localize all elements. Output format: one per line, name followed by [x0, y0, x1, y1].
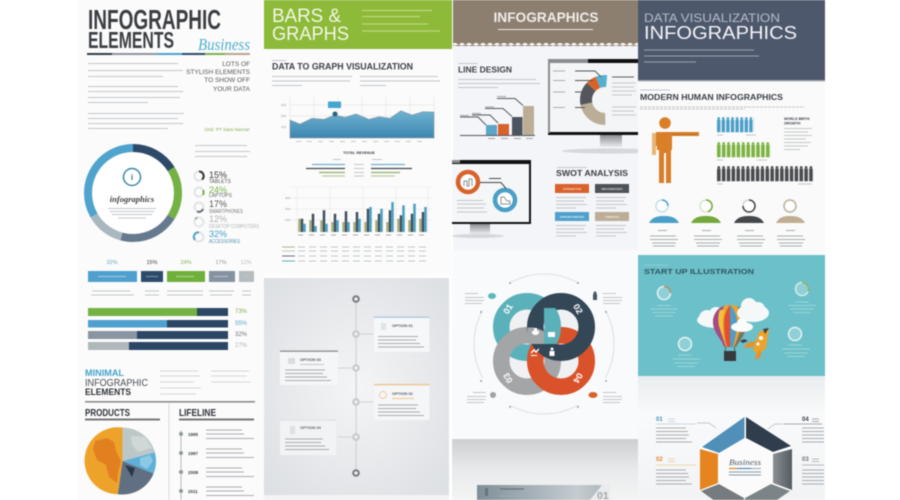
swot: threats: THREATS	[605, 215, 619, 219]
option: dark dome	[734, 200, 765, 246]
lifeline heading: LIFELINE	[179, 408, 216, 419]
people row: blue	[717, 118, 756, 135]
data table	[282, 247, 430, 261]
line design heading: LINE DESIGN	[458, 66, 512, 74]
tagline: LOTS OF	[222, 61, 250, 68]
card: option 04	[280, 420, 336, 455]
lifeline timeline: 2011	[188, 489, 198, 494]
cloud right	[737, 298, 769, 322]
minimal heading: ELEMENTS	[85, 387, 131, 398]
stat: accessories: ACCESSORIES	[209, 239, 241, 245]
stat: desktop computers: 12%	[209, 214, 227, 224]
swot: strengths: STRENGTHS	[563, 187, 581, 191]
segment bar: 32%	[106, 260, 118, 266]
segment bar: 12%	[240, 260, 252, 266]
label: top left	[465, 293, 496, 304]
font credit: Grid: 'PT Sans Narrow'	[204, 127, 250, 132]
intro text	[88, 64, 184, 128]
progress bars: 73%	[235, 309, 248, 315]
panel: bars and graphs	[264, 0, 452, 275]
stat ring: top left	[650, 286, 678, 316]
green header: BARS &	[272, 5, 341, 27]
area chart: 300	[281, 103, 286, 107]
lifeline timeline	[179, 430, 254, 500]
swot analysis	[555, 168, 629, 236]
minimal heading	[85, 368, 148, 398]
donut text	[195, 146, 250, 156]
tagline: YOUR DATA	[213, 86, 251, 93]
chart heading: DATA TO GRAPH VISUALIZATION	[272, 62, 413, 72]
stat list	[194, 170, 260, 245]
hexagon center text: Business	[729, 458, 761, 467]
segment bar: 24%	[180, 260, 192, 266]
stat: tablets: 15%	[209, 170, 227, 180]
minimal heading: MINIMAL	[85, 368, 125, 378]
chart heading	[272, 60, 440, 86]
option 02 text	[656, 457, 696, 484]
ring numbers: 04	[571, 371, 585, 385]
segment bar: 15%	[146, 260, 158, 266]
products heading	[85, 408, 160, 420]
script subtitle: Business	[198, 35, 250, 54]
monitor with half donut	[547, 58, 639, 154]
ring holes	[509, 309, 579, 379]
stepped bar chart	[460, 96, 535, 138]
grouped bar chart	[285, 187, 432, 235]
human figure	[652, 117, 699, 183]
swot: opportunities: OPPORTUNITIES	[560, 215, 584, 219]
orange circle	[458, 172, 478, 192]
stat: smartphones: SMARTPHONES	[209, 209, 244, 215]
progress bars	[88, 308, 248, 350]
green header	[264, 0, 452, 49]
stat: desktop computers	[194, 214, 260, 230]
panel: hexagon business	[638, 376, 825, 500]
hot air balloon	[713, 305, 747, 361]
ring numbers	[501, 302, 585, 385]
callout	[328, 102, 341, 108]
option 03 text	[802, 457, 824, 484]
stat ring: bottom left	[672, 338, 700, 366]
option 02 text: 02	[656, 457, 663, 463]
interlocked rings	[501, 301, 587, 387]
navy header: DATA VISUALIZATION	[644, 11, 780, 25]
stat: accessories	[194, 229, 241, 245]
monitor with two circles	[452, 160, 531, 238]
progress bars: 55%	[235, 321, 248, 327]
blue circle	[495, 190, 515, 210]
panel: start up illustration	[638, 255, 825, 376]
stat: smartphones	[194, 199, 244, 215]
tan header	[453, 0, 638, 46]
progress bars: 27%	[235, 343, 248, 349]
segment bar	[88, 260, 254, 295]
option 01 text: 01	[656, 417, 663, 423]
stat: laptops	[194, 185, 233, 199]
lifeline heading	[179, 408, 254, 420]
tagline: TO SHOW OFF	[204, 77, 250, 84]
ring numbers: 02	[571, 302, 585, 316]
lifeline timeline: 2008	[188, 470, 199, 475]
products heading: PRODUCTS	[85, 408, 130, 419]
panel: infographics line design	[452, 0, 658, 250]
stat ring: top right	[788, 282, 816, 312]
lifeline timeline: 1995	[188, 432, 199, 437]
stat: laptops: 24%	[209, 185, 227, 195]
grouped bar chart: 100	[285, 218, 290, 222]
donut label: infographics	[110, 194, 155, 204]
option 04 text: 04	[802, 417, 809, 423]
pie chart	[85, 427, 156, 495]
panel: timeline options	[264, 278, 449, 500]
card: option 03: OPTION 03	[300, 357, 322, 362]
card: option 03	[280, 350, 338, 385]
green header: GRAPHS	[272, 23, 349, 45]
title	[88, 4, 221, 53]
panel: gray options band	[452, 439, 638, 500]
people row: green	[717, 144, 772, 160]
option: tan dome	[776, 200, 805, 246]
ring numbers: 01	[501, 302, 515, 316]
area chart: 200	[281, 114, 286, 118]
swot analysis: SWOT ANALYSIS	[556, 169, 629, 178]
divider rule	[85, 401, 255, 403]
option: blue dome	[649, 200, 679, 246]
world birth growth	[784, 117, 812, 150]
area chart	[281, 97, 434, 142]
stat: laptops: LAPTOPS	[209, 193, 233, 199]
swot: weaknesses: WEAKNESSES	[601, 187, 623, 191]
grouped bar chart: 200	[285, 207, 290, 211]
progress bars: 32%	[235, 332, 248, 338]
card: option 01	[374, 316, 430, 352]
card: option 04: OPTION 04	[300, 425, 322, 430]
donut chart	[88, 148, 178, 238]
outer arcs	[474, 274, 614, 414]
tagline: STYLISH ELEMENTS	[186, 69, 251, 76]
stat: desktop computers: DESKTOP COMPUTERS	[209, 224, 260, 230]
lifeline timeline: 1997	[188, 451, 199, 456]
world birth growth: WORLD BIRTH	[784, 117, 810, 121]
navy header: INFOGRAPHICS	[644, 23, 797, 43]
timeline nodes	[353, 296, 359, 476]
butterfly bars	[306, 151, 412, 176]
card: option 02: OPTION 02	[392, 391, 414, 396]
title: ELEMENTS	[88, 27, 174, 53]
panel: infographic elements business	[78, 0, 264, 500]
panel: interlocking rings	[464, 273, 623, 415]
tan header: INFOGRAPHICS	[494, 9, 598, 25]
card: option 02	[374, 384, 430, 420]
butterfly bars: TOTAL REVENUE	[343, 151, 375, 155]
tagline	[186, 61, 251, 93]
hexagon	[700, 417, 792, 500]
human figure: DEMOGRAPHIC	[672, 132, 698, 136]
stat: tablets	[194, 170, 232, 185]
world birth growth: GROWTH	[784, 122, 801, 126]
stat: accessories: 32%	[209, 229, 227, 239]
monitor stand	[562, 134, 638, 154]
label: bottom left	[467, 392, 496, 402]
icon: info ring: i	[131, 173, 133, 182]
stat: smartphones: 17%	[209, 199, 227, 209]
option 04 text	[768, 417, 824, 442]
modern human heading: MODERN HUMAN INFOGRAPHICS	[640, 92, 783, 102]
option 01 text	[656, 417, 716, 442]
title: INFOGRAPHIC	[88, 4, 221, 35]
start up heading: START UP ILLUSTRATION	[644, 267, 754, 276]
panel: data visualization infographics	[638, 0, 825, 255]
area chart: 100	[281, 125, 286, 129]
people row: dark	[717, 168, 814, 184]
stat ring: bottom right	[782, 328, 810, 356]
start up heading	[644, 265, 754, 276]
minimal heading: INFOGRAPHIC	[85, 378, 148, 389]
grouped bar chart: 300	[285, 196, 290, 200]
minimal text	[160, 371, 251, 394]
colored rule	[87, 53, 250, 55]
option: green dome	[691, 200, 722, 246]
card: option 01: OPTION 01	[392, 323, 414, 328]
rocket	[740, 328, 769, 360]
line design heading	[458, 64, 540, 88]
ring icons	[531, 328, 555, 356]
label: bottom right	[588, 392, 622, 402]
ring numbers: 03	[501, 371, 515, 385]
half donut	[586, 81, 624, 119]
option 03 text: 03	[802, 457, 809, 463]
navy header	[638, 0, 825, 82]
stat: tablets: TABLETS	[209, 179, 232, 185]
segment bar: 17%	[215, 260, 227, 266]
label: top right	[593, 292, 622, 304]
monitor stand	[452, 224, 504, 238]
cloud left	[697, 307, 735, 328]
cloud small	[731, 318, 753, 332]
